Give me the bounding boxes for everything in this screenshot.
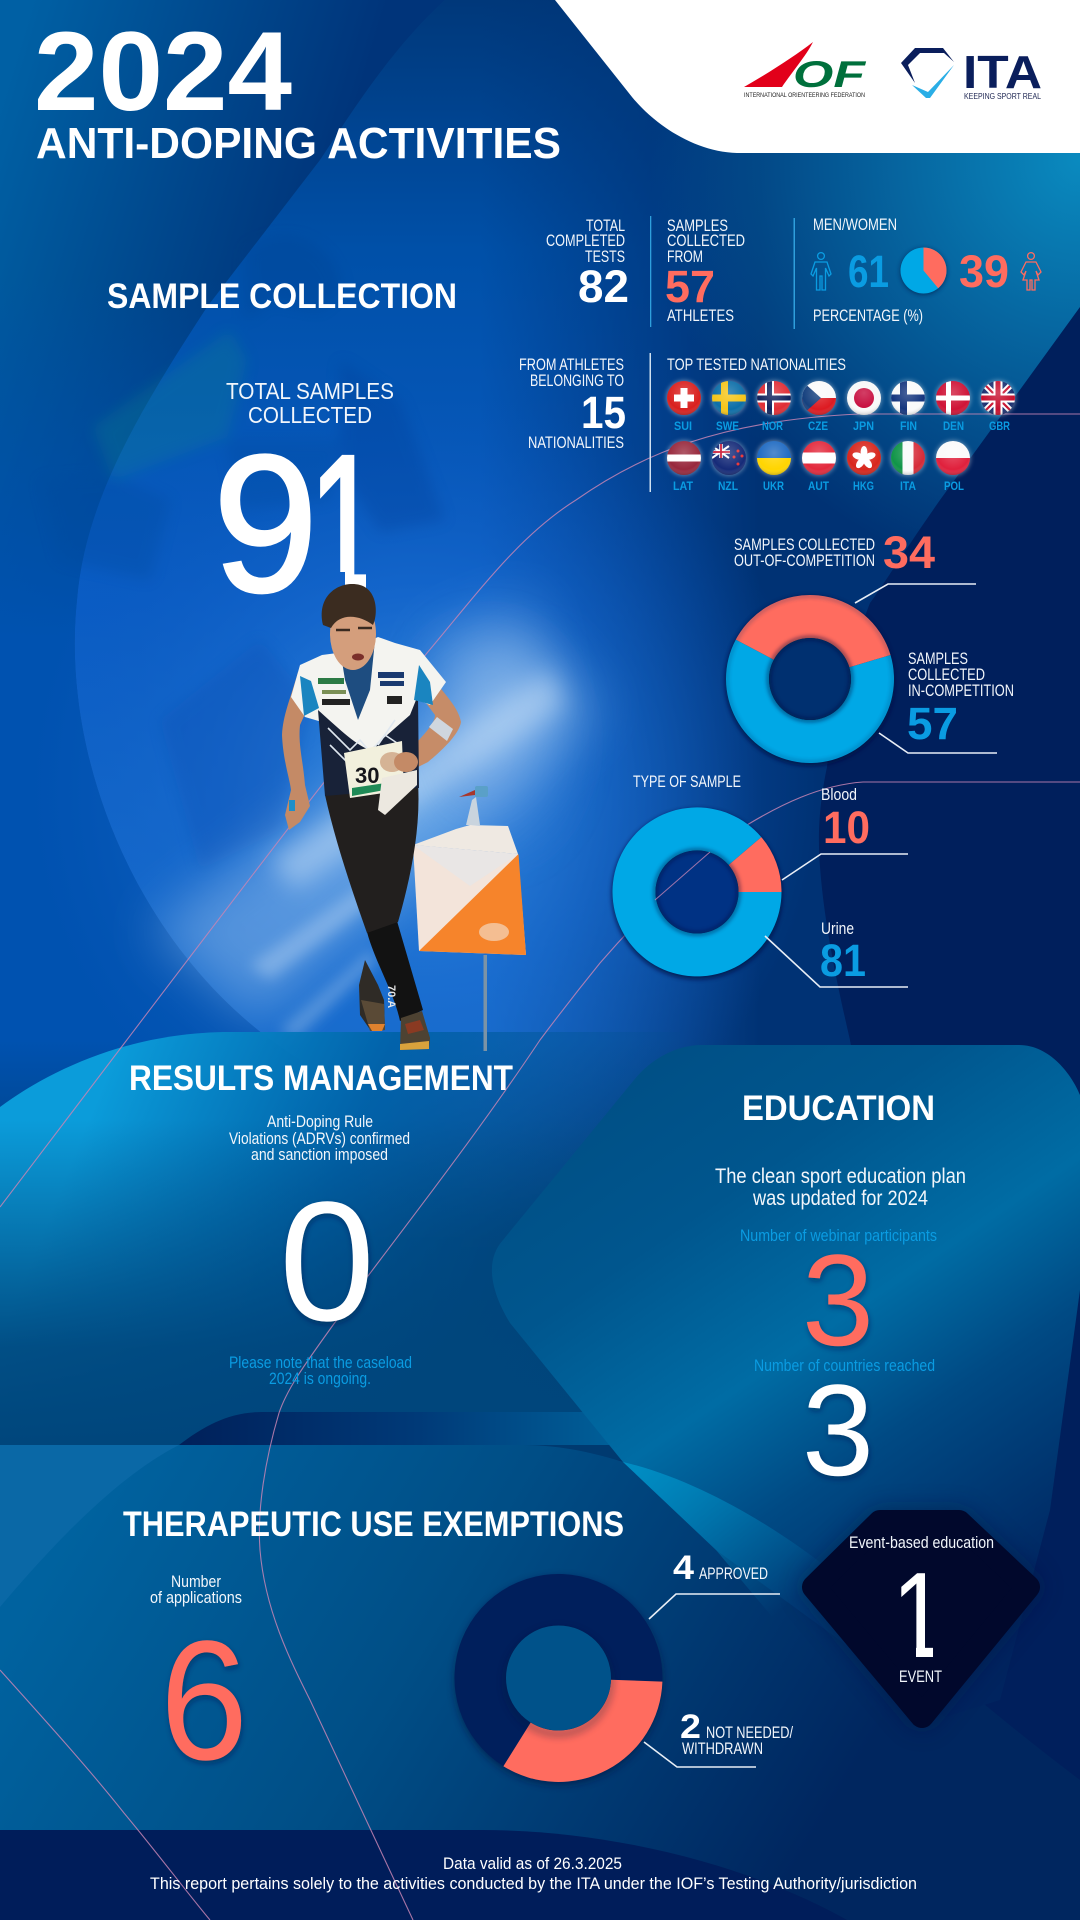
flag glows: [666, 380, 1016, 476]
face: [330, 598, 376, 670]
lower background fade: [0, 1040, 1080, 1460]
callout: not needed / withdrawn: [644, 1708, 793, 1767]
stat: nationalities: NATIONALITIES: [528, 434, 624, 452]
stat: men/women percentage: PERCENTAGE (%): [813, 307, 923, 325]
chart: in vs out of competition donut: [725, 595, 895, 766]
callout: approved: [649, 1549, 780, 1619]
logo: IOF: INTERNATIONAL ORIENTEERING FEDERATION: [744, 92, 865, 99]
panel: event-based education: EVENT: [899, 1668, 942, 1686]
flag: ITA: [891, 441, 926, 475]
note: caseload: 2024 is ongoing.: [269, 1370, 371, 1388]
callout: blood: Blood: [821, 785, 857, 804]
heading: education: EDUCATION: [742, 1089, 935, 1128]
stat: samples collected from athletes: SAMPLES: [667, 217, 728, 235]
footer note: [150, 1855, 917, 1893]
stat: total completed tests: 82: [578, 261, 629, 312]
title: [34, 9, 561, 168]
stat: men/women percentage: 61: [848, 246, 889, 297]
logo: IOF: OF: [793, 54, 867, 95]
callout: approved: 4: [673, 1549, 694, 1587]
flag: POL: [936, 441, 970, 475]
flag: AUT: [802, 441, 836, 475]
panel: results management: [0, 1032, 680, 1445]
right navy region: [819, 307, 1080, 1920]
panel: education: [492, 1045, 1080, 1717]
neck: [341, 640, 375, 720]
footer band: [0, 1830, 847, 1920]
flag labels: POL: [944, 479, 964, 493]
text: ADRV description: Violations (ADRVs) confirmed: [229, 1130, 410, 1148]
flag: DEN: [936, 381, 970, 415]
stat: number of applications: Number: [171, 1573, 221, 1591]
text: education plan: was updated for 2024: [752, 1187, 928, 1210]
flag: LAT: [667, 441, 701, 475]
stat: samples collected from athletes: ATHLETES: [667, 307, 734, 325]
callout: out-of-competition: 34: [883, 527, 935, 578]
title: ANTI-DOPING ACTIVITIES: [36, 119, 561, 168]
pie: men/women: [900, 248, 947, 295]
stat: samples collected from athletes: 57: [665, 261, 715, 312]
stat: countries reached: 3: [802, 1357, 874, 1503]
panel: event-based education: [814, 1522, 1028, 1716]
panel: TUE left wedge: [0, 1445, 179, 1607]
top tested nationalities: [666, 356, 1016, 493]
footer note: Data valid as of 26.3.2025: [443, 1855, 622, 1873]
back leg and shoe: [359, 960, 385, 1031]
total samples collected: 1: [309, 415, 381, 633]
stat: men/women percentage: [811, 216, 1041, 325]
hair: [322, 584, 376, 628]
note: caseload: Please note that the caseload: [229, 1354, 412, 1372]
logo: ITA: KEEPING SPORT REAL: [964, 91, 1041, 101]
map and hand: [378, 770, 417, 815]
stat: total completed tests: TESTS: [585, 248, 625, 266]
front calf sock: [367, 921, 423, 1021]
stat: webinar participants: Number of webinar participants: [740, 1227, 937, 1245]
total samples collected: [220, 383, 393, 594]
illustration: athlete: 70.A: [385, 985, 397, 1008]
panel: event-based education: 1: [892, 1547, 946, 1683]
stat: countries reached: Number of countries reached: [754, 1357, 935, 1375]
stat: nationalities: 15: [581, 387, 626, 438]
flag: FIN: [891, 381, 925, 415]
left arm: [282, 672, 310, 830]
shirt logos: [318, 672, 404, 705]
stat: number of applications: 6: [160, 1606, 248, 1796]
logo: ITA: [901, 46, 1042, 101]
callout: in-competition: 57: [907, 698, 958, 749]
shirt lower pattern: [318, 695, 419, 796]
flag labels: AUT: [808, 479, 830, 493]
flag labels: [673, 419, 1010, 493]
flag labels: DEN: [943, 419, 964, 433]
flag labels: NOR: [762, 419, 783, 433]
flag labels: ITA: [900, 479, 916, 493]
stat: webinar participants: [740, 1227, 937, 1373]
stat: total completed tests: [546, 217, 629, 312]
stat: total completed tests: COMPLETED: [546, 232, 625, 250]
heading: results management: RESULTS MANAGEMENT: [129, 1059, 513, 1098]
white logo corner: [555, 0, 1080, 153]
text: education plan: The clean sport education plan: [715, 1165, 966, 1188]
callout: out-of-competition: [734, 527, 976, 603]
blue sleeve stripes: [300, 676, 319, 716]
flag labels: LAT: [673, 479, 694, 493]
callout: not needed / withdrawn: 2: [680, 1708, 701, 1746]
footer note: This report pertains solely to the activities conducted by the ITA under the IOF’s Testing Authority/jurisdiction: [150, 1875, 917, 1893]
flag: SUI: [667, 381, 701, 415]
logo: IOF: [744, 42, 867, 99]
ghost background athlete: [40, 237, 445, 870]
callout: in-competition: [879, 650, 1014, 753]
decorative curved lines: [0, 414, 1080, 1207]
illustration: control flag: [413, 786, 526, 1051]
number: ADRV zero: 0: [279, 1167, 375, 1357]
flag: NZL: [712, 441, 746, 475]
callout: approved: APPROVED: [699, 1565, 768, 1583]
flag labels: UKR: [763, 479, 784, 493]
flag: HKG: [847, 441, 881, 475]
callout: in-competition: COLLECTED: [908, 666, 985, 684]
callout: in-competition: IN-COMPETITION: [908, 682, 1014, 700]
flag labels: HKG: [853, 479, 874, 493]
dark band behind TUE panel: [179, 1412, 660, 1445]
pants: [325, 783, 418, 933]
flag: GBR: [981, 381, 1015, 415]
note: caseload: [229, 1354, 412, 1388]
logo: ITA: ITA: [963, 46, 1042, 98]
flag: SWE: [712, 381, 746, 415]
total samples collected: TOTAL SAMPLES: [226, 378, 394, 404]
callout: urine: [765, 919, 908, 987]
education and TUE overlap highlight: [623, 1462, 830, 1650]
heading: therapeutic use exemptions: THERAPEUTIC USE EXEMPTIONS: [123, 1505, 624, 1544]
stat: samples collected from athletes: [665, 217, 745, 325]
flag labels: SWE: [716, 419, 739, 433]
title: 2024: [34, 9, 292, 134]
bib: 30: [355, 763, 379, 788]
stat: nationalities: [519, 356, 626, 452]
shirt white: [291, 637, 446, 760]
panel: therapeutic use exemptions: [0, 1445, 1080, 1920]
flag: UKR: [757, 441, 791, 475]
callout: urine: 81: [820, 935, 866, 986]
flag labels: GBR: [989, 419, 1010, 433]
callout: urine: Urine: [821, 919, 854, 938]
stat: number of applications: of applications: [150, 1589, 242, 1607]
illustration: athlete: [282, 584, 461, 1050]
callout: in-competition: SAMPLES: [908, 650, 968, 668]
total samples collected: COLLECTED: [248, 402, 372, 428]
stat: samples collected from athletes: COLLECTED: [667, 232, 745, 250]
text: ADRV description: and sanction imposed: [251, 1146, 388, 1164]
icon: woman: [1021, 253, 1041, 290]
stat: nationalities: FROM ATHLETES: [519, 356, 624, 374]
stat: countries reached: [754, 1357, 935, 1503]
flag: CZE: [802, 381, 836, 415]
stat: men/women percentage: 39: [959, 246, 1009, 297]
bib: [344, 741, 404, 798]
stat: total completed tests: TOTAL: [586, 217, 625, 235]
callout: out-of-competition: SAMPLES COLLECTED: [734, 536, 875, 554]
flag labels: NZL: [718, 479, 738, 493]
flag: NOR: [757, 381, 791, 415]
chart: type of sample donut: [612, 807, 782, 980]
callout: out-of-competition: OUT-OF-COMPETITION: [734, 552, 875, 570]
text: ADRV description: [229, 1113, 410, 1164]
front shoe: [400, 1011, 430, 1050]
flag labels: JPN: [853, 419, 874, 433]
stat: nationalities: BELONGING TO: [530, 372, 624, 390]
stat: men/women percentage: MEN/WOMEN: [813, 216, 897, 234]
callout: blood: 10: [823, 802, 870, 853]
heading: sample collection: SAMPLE COLLECTION: [107, 277, 457, 316]
callout: blood: [782, 785, 908, 880]
label: type of sample: TYPE OF SAMPLE: [633, 773, 741, 791]
stat: webinar participants: 3: [802, 1227, 874, 1373]
callout: not needed / withdrawn: WITHDRAWN: [682, 1740, 763, 1758]
right arm: [398, 668, 461, 772]
panel: event-based education: Event-based education: [849, 1534, 994, 1552]
top tested nationalities: TOP TESTED NATIONALITIES: [667, 356, 846, 374]
flag labels: CZE: [808, 419, 828, 433]
chart: TUE donut: [454, 1574, 662, 1785]
text: ADRV description: Anti-Doping Rule: [267, 1113, 373, 1131]
text: education plan: [715, 1165, 966, 1210]
flag labels: FIN: [900, 419, 917, 433]
flag labels: SUI: [674, 419, 692, 433]
flag: JPN: [847, 381, 881, 415]
stat: samples collected from athletes: FROM: [667, 248, 703, 266]
total samples collected: 9: [213, 415, 318, 633]
callout: not needed / withdrawn: NOT NEEDED/: [706, 1724, 793, 1742]
light rays: [150, 600, 600, 1040]
icon: man: [811, 253, 831, 290]
